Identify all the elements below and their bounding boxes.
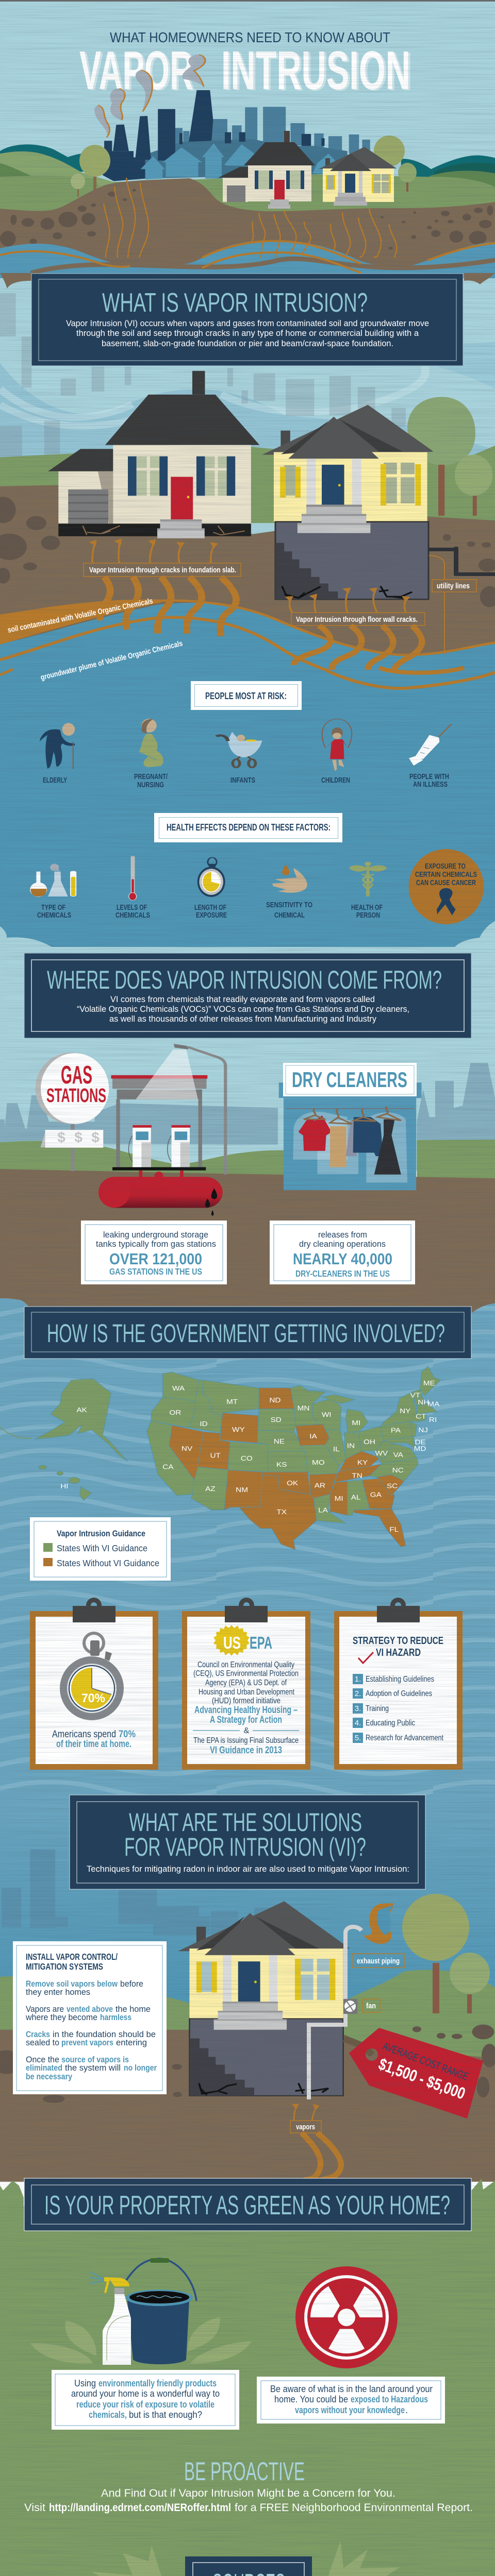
panel: solutions heading: FOR VAPOR INTRUSION (VI)? (124, 1833, 366, 1861)
callout: vapors: vapors (296, 2123, 315, 2131)
panel: what is vapor intrusion (31, 274, 463, 366)
stat box: dry cleaners: releases from (318, 1230, 367, 1240)
labels: health factors: LEVELS OF (117, 904, 147, 912)
text block: epa initiative: (HUD) formed initiative (212, 1697, 280, 1705)
list numbers: 1. (355, 1675, 361, 1684)
labels: health factors: CHEMICALS (116, 911, 150, 920)
map state labels: MD (414, 1445, 426, 1452)
icon: epa starburst (213, 1625, 250, 1656)
map state labels: ND (269, 1396, 280, 1404)
icon: pregnant (139, 719, 163, 767)
callout: exhaust piping: exhaust piping (357, 1957, 400, 1965)
text block: strategy heading: VI HAZARD (376, 1647, 421, 1658)
icon: thermometer (129, 856, 137, 900)
panel: mitigation systems: no longer (124, 2063, 157, 2073)
icon: child with jump rope (322, 719, 352, 771)
price tag string (344, 2039, 372, 2055)
stat box: dry cleaners: dry cleaning operations (299, 1240, 386, 1249)
callout: foundation slab cracks (84, 563, 241, 577)
heading box: health effects (154, 813, 342, 842)
panel: mitigation systems: be necessary (26, 2072, 72, 2081)
label: groundwater plume: groundwater plume of Volatile Organic Chemicals (40, 639, 184, 682)
labels: people at risk: CHILDREN (321, 776, 350, 785)
map state labels: WV (375, 1449, 388, 1457)
map state labels: KS (276, 1461, 287, 1468)
map state labels: WA (172, 1384, 185, 1392)
panel: mitigation systems: harmless (100, 2012, 131, 2022)
callout: fan: fan (366, 2002, 376, 2010)
text block: source intro: VI comes from chemicals that readily evaporate and form vapors called (110, 994, 375, 1004)
text block: epa initiative: (CEQ), US Environmental Protection (193, 1669, 299, 1678)
panel: solutions heading: WHAT ARE THE SOLUTIONS (129, 1808, 362, 1837)
map state labels: AL (351, 1494, 361, 1501)
callout: exhaust piping (352, 1954, 404, 1968)
stat box: gas stations: leaking underground storage (103, 1230, 208, 1240)
text block: time at home (52, 1729, 136, 1750)
background: sky (0, 0, 495, 639)
text block: epa initiative: Advancing Healthy Housing – (194, 1705, 298, 1716)
text box: land awareness: exposed to Hazardous (351, 2394, 428, 2404)
clipboard: epa (182, 1598, 310, 1770)
icon: bucket (126, 2258, 196, 2364)
text box: friendly products: reduce your risk of exposure to volatile (76, 2399, 214, 2410)
heading box: people most at risk (191, 681, 302, 710)
utility vapor line (429, 555, 444, 654)
map state labels: CA (162, 1463, 174, 1470)
map state labels: CO (241, 1454, 253, 1462)
labels: health factors: PERSON (356, 911, 380, 920)
vapor lines rising through soil (104, 178, 397, 258)
sign text: gas stations: STATIONS (46, 1085, 106, 1107)
map state labels: SC (387, 1482, 398, 1489)
map state labels: SD (271, 1416, 282, 1423)
panel: mitigation systems: prevent vapors (61, 2038, 113, 2047)
text box: friendly products (52, 2370, 239, 2430)
clipboard: time at home (30, 1598, 158, 1770)
panel: mitigation systems: they enter homes (26, 1987, 90, 1997)
stat box: gas stations (81, 1221, 227, 1284)
panel: mitigation systems: in the foundation should be (53, 2029, 156, 2039)
list: strategy steps: Research for Advancement (366, 1734, 443, 1742)
groundwater and contaminated soil bands (0, 599, 495, 670)
labels: people at risk (43, 773, 449, 789)
price tag (349, 2028, 483, 2119)
thick vapor streams: right (294, 625, 422, 670)
clipboard: strategy (334, 1598, 463, 1770)
labels: health factors: CERTAIN CHEMICALS (415, 871, 477, 879)
main title (79, 40, 412, 102)
groundwater band with contaminated lines (0, 241, 495, 278)
map state labels: FL (389, 1526, 399, 1533)
panel: green property heading (24, 2178, 471, 2231)
map state labels: ME (423, 1379, 435, 1386)
map state labels: UT (210, 1452, 221, 1459)
callout: vapors (290, 2121, 321, 2133)
text block: epa initiative: Agency (EPA) & US Dept. of (205, 1679, 287, 1687)
heading box: people most at risk: PEOPLE MOST AT RISK: (205, 690, 287, 701)
text block: call to action (24, 2487, 473, 2514)
legend: States With VI Guidance (57, 1543, 147, 1553)
panel: sources heading (185, 2556, 312, 2576)
thick vapor streams: solutions (302, 2133, 341, 2180)
text box: land awareness (257, 2377, 445, 2424)
panel: mitigation systems: vented above (67, 2004, 113, 2014)
map state labels: MN (298, 1404, 309, 1412)
map state labels: NC (392, 1466, 404, 1474)
labels: people at risk: AN ILLNESS (413, 781, 448, 789)
text box: land awareness: vapors without your knowledge (295, 2404, 405, 2415)
panel: mitigation systems: sealed to (26, 2038, 59, 2047)
map state labels: AK (76, 1406, 87, 1414)
price sign dollars: $ (74, 1129, 82, 1145)
panel: mitigation systems: source of vapors is (61, 2055, 129, 2064)
callout: utility lines (432, 580, 476, 592)
panel: mitigation systems: MITIGATION SYSTEMS (26, 1961, 103, 1972)
list numbers: 3. (355, 1704, 361, 1713)
icon: syringe (409, 724, 452, 766)
map state labels: MO (312, 1459, 325, 1466)
panel: mitigation systems: Cracks (26, 2029, 50, 2039)
hills and soil: house scene (0, 397, 495, 670)
labels: people at risk: PEOPLE WITH (409, 773, 449, 781)
list number squares (353, 1674, 363, 1743)
labels: people at risk: ELDERLY (43, 776, 67, 785)
fan (343, 1999, 357, 2014)
panel: mitigation systems: before (120, 1979, 143, 1989)
text box: land awareness: . (405, 2404, 408, 2415)
icon: spray bottle (89, 2272, 131, 2365)
artwork: people at risk icons (40, 719, 452, 771)
map state labels: OK (287, 1479, 299, 1487)
background: swirling vapor sky behind houses (0, 293, 495, 468)
map state labels: MT (226, 1398, 238, 1405)
stat box: dry cleaners: DRY-CLEANERS IN THE US (295, 1268, 390, 1279)
text box: friendly products: around your home is a wonderful way to (71, 2388, 220, 2399)
map state labels: NY (400, 1407, 411, 1415)
callout: fan (362, 1999, 380, 2012)
panel: mitigation systems: the home (116, 2004, 151, 2014)
legend: States Without VI Guidance (57, 1558, 159, 1568)
leaves behind cleaning supplies (30, 2317, 252, 2364)
hills: teal and green (0, 144, 495, 213)
text block: call to action: http://landing.edrnet.com/NERoffer.html (49, 2501, 231, 2514)
icon: cancer circle with ribbon (408, 849, 484, 924)
yellow house: title scene (319, 147, 397, 206)
price tag text: $1,500 - $5,000 (376, 2055, 468, 2103)
text block: definition: through the soil and seep through cracks in any type of home or commercial building with a (76, 328, 419, 338)
panel: mitigation systems: eliminated (26, 2063, 62, 2073)
heading: be proactive: BE PROACTIVE (184, 2457, 305, 2486)
price sign dollars (57, 1129, 100, 1145)
beige house: title scene (218, 131, 315, 209)
text block: definition: basement, slab-on-grade foundation or pier and beam/crawl-space foundation. (102, 338, 393, 348)
map state labels: ID (200, 1420, 208, 1428)
callout: utility lines: utility lines (437, 582, 470, 590)
list numbers: 2. (355, 1689, 361, 1698)
sign: dry cleaners: DRY CLEANERS (292, 1067, 407, 1092)
callout: floor wall cracks (291, 613, 425, 625)
utility pipes (428, 547, 495, 576)
map state labels: OH (364, 1438, 375, 1446)
price sign dollars: $ (57, 1129, 65, 1145)
text block: time at home: of their time at home. (56, 1739, 131, 1750)
stopwatch percent: 70% (81, 1691, 105, 1705)
thick vapor streams: left (100, 577, 236, 636)
labels: health factors: TYPE OF (41, 904, 65, 912)
map state labels: AZ (205, 1485, 216, 1493)
text block: epa initiative (193, 1660, 299, 1756)
house: basement (262, 405, 434, 599)
sign text: gas stations: GAS (61, 1061, 92, 1089)
ghost skyline and hills (0, 1063, 495, 1181)
text block: call to action: Visit (24, 2501, 45, 2514)
gas station canopy and pumps (111, 1044, 225, 1175)
text block: epa initiative: & (244, 1726, 250, 1735)
water corners: sky (0, 921, 495, 947)
lower contaminated plume lines (0, 668, 495, 688)
house: slab on grade (48, 371, 259, 538)
list numbers (355, 1675, 361, 1742)
labels: health factors: EXPOSURE (196, 911, 227, 920)
icon: infant stroller (216, 732, 262, 768)
map state labels: WY (232, 1426, 245, 1433)
list: strategy steps: Establishing Guidelines (366, 1675, 434, 1684)
map state labels: GA (370, 1491, 382, 1498)
labels: health factors: HEALTH OF (351, 904, 383, 912)
map state labels: PA (391, 1427, 401, 1434)
labels: health factors: SENSITIVITY TO (266, 901, 312, 909)
text block: epa initiative: VI Guidance in 2013 (210, 1745, 282, 1756)
arrows: vapors into basement (289, 590, 407, 613)
legend: Vapor Intrusion Guidance (57, 1529, 145, 1538)
heading: what is vapor intrusion: WHAT IS VAPOR INTRUSION? (102, 288, 368, 318)
heading box: health effects: HEALTH EFFECTS DEPEND ON THESE FACTORS: (167, 822, 331, 833)
label: contaminated soil: soil contaminated with Volatile Organic Chemicals (7, 597, 154, 635)
panel: mitigation systems: Once the (26, 2055, 59, 2064)
map state labels: TN (352, 1472, 362, 1479)
panel: mitigation systems: Remove soil vapors below (26, 1979, 118, 1989)
panel: mitigation systems: Vapors are (26, 2004, 64, 2014)
panel: mitigation systems: where they become (25, 2012, 97, 2022)
map state labels: NJ (418, 1426, 428, 1434)
text block: epa initiative: Council on Environmental Quality (197, 1660, 294, 1669)
labels: health factors: CAN CAUSE CANCER (416, 879, 476, 887)
text box: friendly products: chemicals, (89, 2409, 127, 2420)
city skyline and factories (103, 90, 370, 181)
text block: epa initiative: A Strategy for Action (210, 1715, 282, 1725)
icon: elderly (40, 723, 75, 769)
list: strategy steps: Adoption of Guidelines (366, 1689, 432, 1698)
map state labels: MI (335, 1495, 343, 1502)
map state labels: TX (276, 1508, 287, 1515)
icon: red check mark (358, 1652, 373, 1663)
logo text: us epa: EPA (250, 1633, 272, 1652)
arrows: vapors into slab and basement (92, 541, 214, 563)
stat box: gas stations: GAS STATIONS IN THE US (109, 1266, 202, 1277)
map state labels: IN (347, 1442, 355, 1449)
labels: health factors: LENGTH OF (194, 904, 226, 912)
list numbers: 4. (355, 1719, 361, 1727)
text block: time at home: 70% (119, 1729, 136, 1740)
grass tufts: sources (73, 2541, 418, 2576)
callout: foundation slab cracks: Vapor Intrusion through cracks in foundation slab. (89, 566, 236, 574)
panel: solutions heading: Techniques for mitigating radon in indoor air are also used to mitigate Vapor Intrusion: (87, 1864, 409, 1874)
map state labels: NH (418, 1398, 429, 1406)
text block: source intro: “Volatile Organic Chemicals (VOCs)” VOCs can come from Gas Stations and Dry cleaners, (77, 1004, 409, 1014)
sign: dry cleaners (283, 1063, 417, 1096)
text box: friendly products: environmentally friendly products (98, 2378, 217, 2388)
map state labels: NM (236, 1486, 248, 1494)
chart: us map of vapor intrusion guidance (0, 1366, 440, 1550)
hills and soil: solutions section (0, 1970, 495, 2182)
list: strategy steps: Educating Public (366, 1719, 415, 1727)
panel: government heading (24, 1307, 471, 1359)
mitigation piping and exhaust (309, 1903, 393, 2099)
map state labels: RI (429, 1416, 437, 1423)
gas station sign (36, 1053, 109, 1171)
map state labels: CT (416, 1413, 426, 1420)
price tag text (376, 2040, 470, 2103)
text block: definition: Vapor Intrusion (VI) occurs when vapors and gases from contaminated soil and groundwater move (66, 318, 429, 328)
map state labels: NE (274, 1437, 285, 1445)
panel: where does vapor intrusion come from (24, 953, 471, 1038)
artwork: health factors icons (30, 849, 484, 924)
background: sky, sources section (0, 947, 495, 1171)
labels: people at risk: INFANTS (230, 776, 255, 785)
panel: mitigation systems (13, 1941, 167, 2094)
dry cleaners storefront and clothes (279, 1082, 422, 1190)
panel: solutions heading (70, 1795, 425, 1889)
arrows: vapors (294, 2106, 317, 2121)
list: strategy steps (366, 1675, 443, 1742)
labels: health factors: EXPOSURE TO (425, 862, 466, 871)
main title: VAPOR (79, 40, 193, 101)
text box: friendly products: but is that enough? (129, 2409, 202, 2420)
map state labels: OR (169, 1409, 181, 1416)
map state labels: WI (322, 1411, 332, 1418)
list numbers: 5. (355, 1734, 361, 1742)
sign text: gas stations (46, 1061, 106, 1107)
icon: stopwatch 70 percent (60, 1633, 124, 1720)
leaking underground tank (98, 1171, 223, 1216)
divider rules (193, 1730, 299, 1731)
map state labels: IA (309, 1432, 317, 1440)
map state labels: VA (393, 1451, 404, 1459)
smoke plumes (94, 55, 206, 138)
map state labels: VT (410, 1392, 421, 1399)
map state labels: MA (427, 1400, 440, 1408)
map state labels: DE (415, 1438, 426, 1446)
text block: definition (66, 318, 429, 348)
background: water (0, 668, 495, 947)
stat box: gas stations: tanks typically from gas stations (96, 1240, 216, 1249)
price sign dollars: $ (91, 1129, 100, 1145)
subtitle: WHAT HOMEOWNERS NEED TO KNOW ABOUT (110, 29, 390, 45)
main title: VAPOR (81, 41, 195, 102)
labels: health factors (37, 862, 477, 920)
map state labels: IL (333, 1445, 340, 1453)
stat box: dry cleaners (270, 1221, 415, 1284)
labels: health factors: CHEMICAL (274, 911, 305, 920)
background: wavy water, government section (0, 1298, 495, 1814)
stat box: dry cleaners: NEARLY 40,000 (293, 1250, 392, 1268)
text block: strategy heading: STRATEGY TO REDUCE (353, 1635, 443, 1647)
icon: caduceus (349, 862, 387, 896)
icon: hand and drop (272, 865, 307, 893)
map state labels: KY (357, 1459, 368, 1466)
list: strategy steps: Training (366, 1704, 389, 1713)
trees: solutions scene (402, 1894, 490, 2013)
map state labels: MI (352, 1419, 360, 1427)
background: green lawn (0, 2179, 495, 2576)
logo text: us epa: US (223, 1633, 241, 1652)
text block: epa initiative: Housing and Urban Development (199, 1688, 294, 1697)
icon: flasks (30, 863, 76, 897)
callout: floor wall cracks: Vapor Intrusion through floor wall cracks. (296, 616, 418, 624)
background: solutions section sky (0, 1798, 495, 2004)
labels: people at risk: PREGNANT/ (134, 773, 168, 781)
text block: source intro: as well as thousands of other releases from Manufacturing and Industry (109, 1014, 376, 1024)
map state labels: AR (315, 1482, 325, 1489)
map state labels: HI (60, 1482, 69, 1489)
icon: stopwatch (197, 857, 225, 897)
text block: source intro (77, 994, 409, 1024)
text block: strategy heading (353, 1635, 443, 1658)
labels: people at risk: NURSING (137, 781, 164, 789)
labels: health factors: CHEMICALS (37, 911, 71, 920)
map state labels (60, 1379, 440, 1533)
trees: title scene (71, 135, 417, 197)
stones: title scene (0, 189, 493, 249)
text block: time at home: Americans spend (52, 1729, 116, 1740)
stat box: gas stations: OVER 121,000 (109, 1250, 202, 1268)
text block: call to action: And Find Out if Vapor Intrusion Might be a Concern for You. (101, 2487, 395, 2499)
map state labels: NV (182, 1445, 193, 1452)
ground: brown soil sources section (0, 1169, 495, 1314)
text box: friendly products: Using (74, 2378, 96, 2388)
panel: mitigation systems: the system will (65, 2063, 121, 2073)
panel: mitigation systems: INSTALL VAPOR CONTROL/ (26, 1952, 118, 1962)
icon: radiation symbol (295, 2266, 398, 2368)
house with mitigation system (178, 1901, 350, 2096)
legend (30, 1517, 171, 1581)
brown soil edges under panel (0, 273, 495, 289)
ghost skyline: solutions section (2, 1849, 270, 1935)
text block: call to action: for a FREE Neighborhood Environmental Report. (235, 2501, 473, 2514)
logo text: us epa (223, 1633, 272, 1652)
top bar (0, 0, 495, 2)
ground: brown soil (0, 178, 495, 278)
text box: land awareness: Be aware of what is in the land around your (270, 2383, 433, 2394)
map state labels: LA (318, 1506, 328, 1514)
text block: epa initiative: The EPA is Issuing Final Subsurface (193, 1736, 299, 1745)
text box: land awareness: home. You could be (274, 2394, 348, 2404)
panel: mitigation systems: entering (116, 2038, 147, 2047)
